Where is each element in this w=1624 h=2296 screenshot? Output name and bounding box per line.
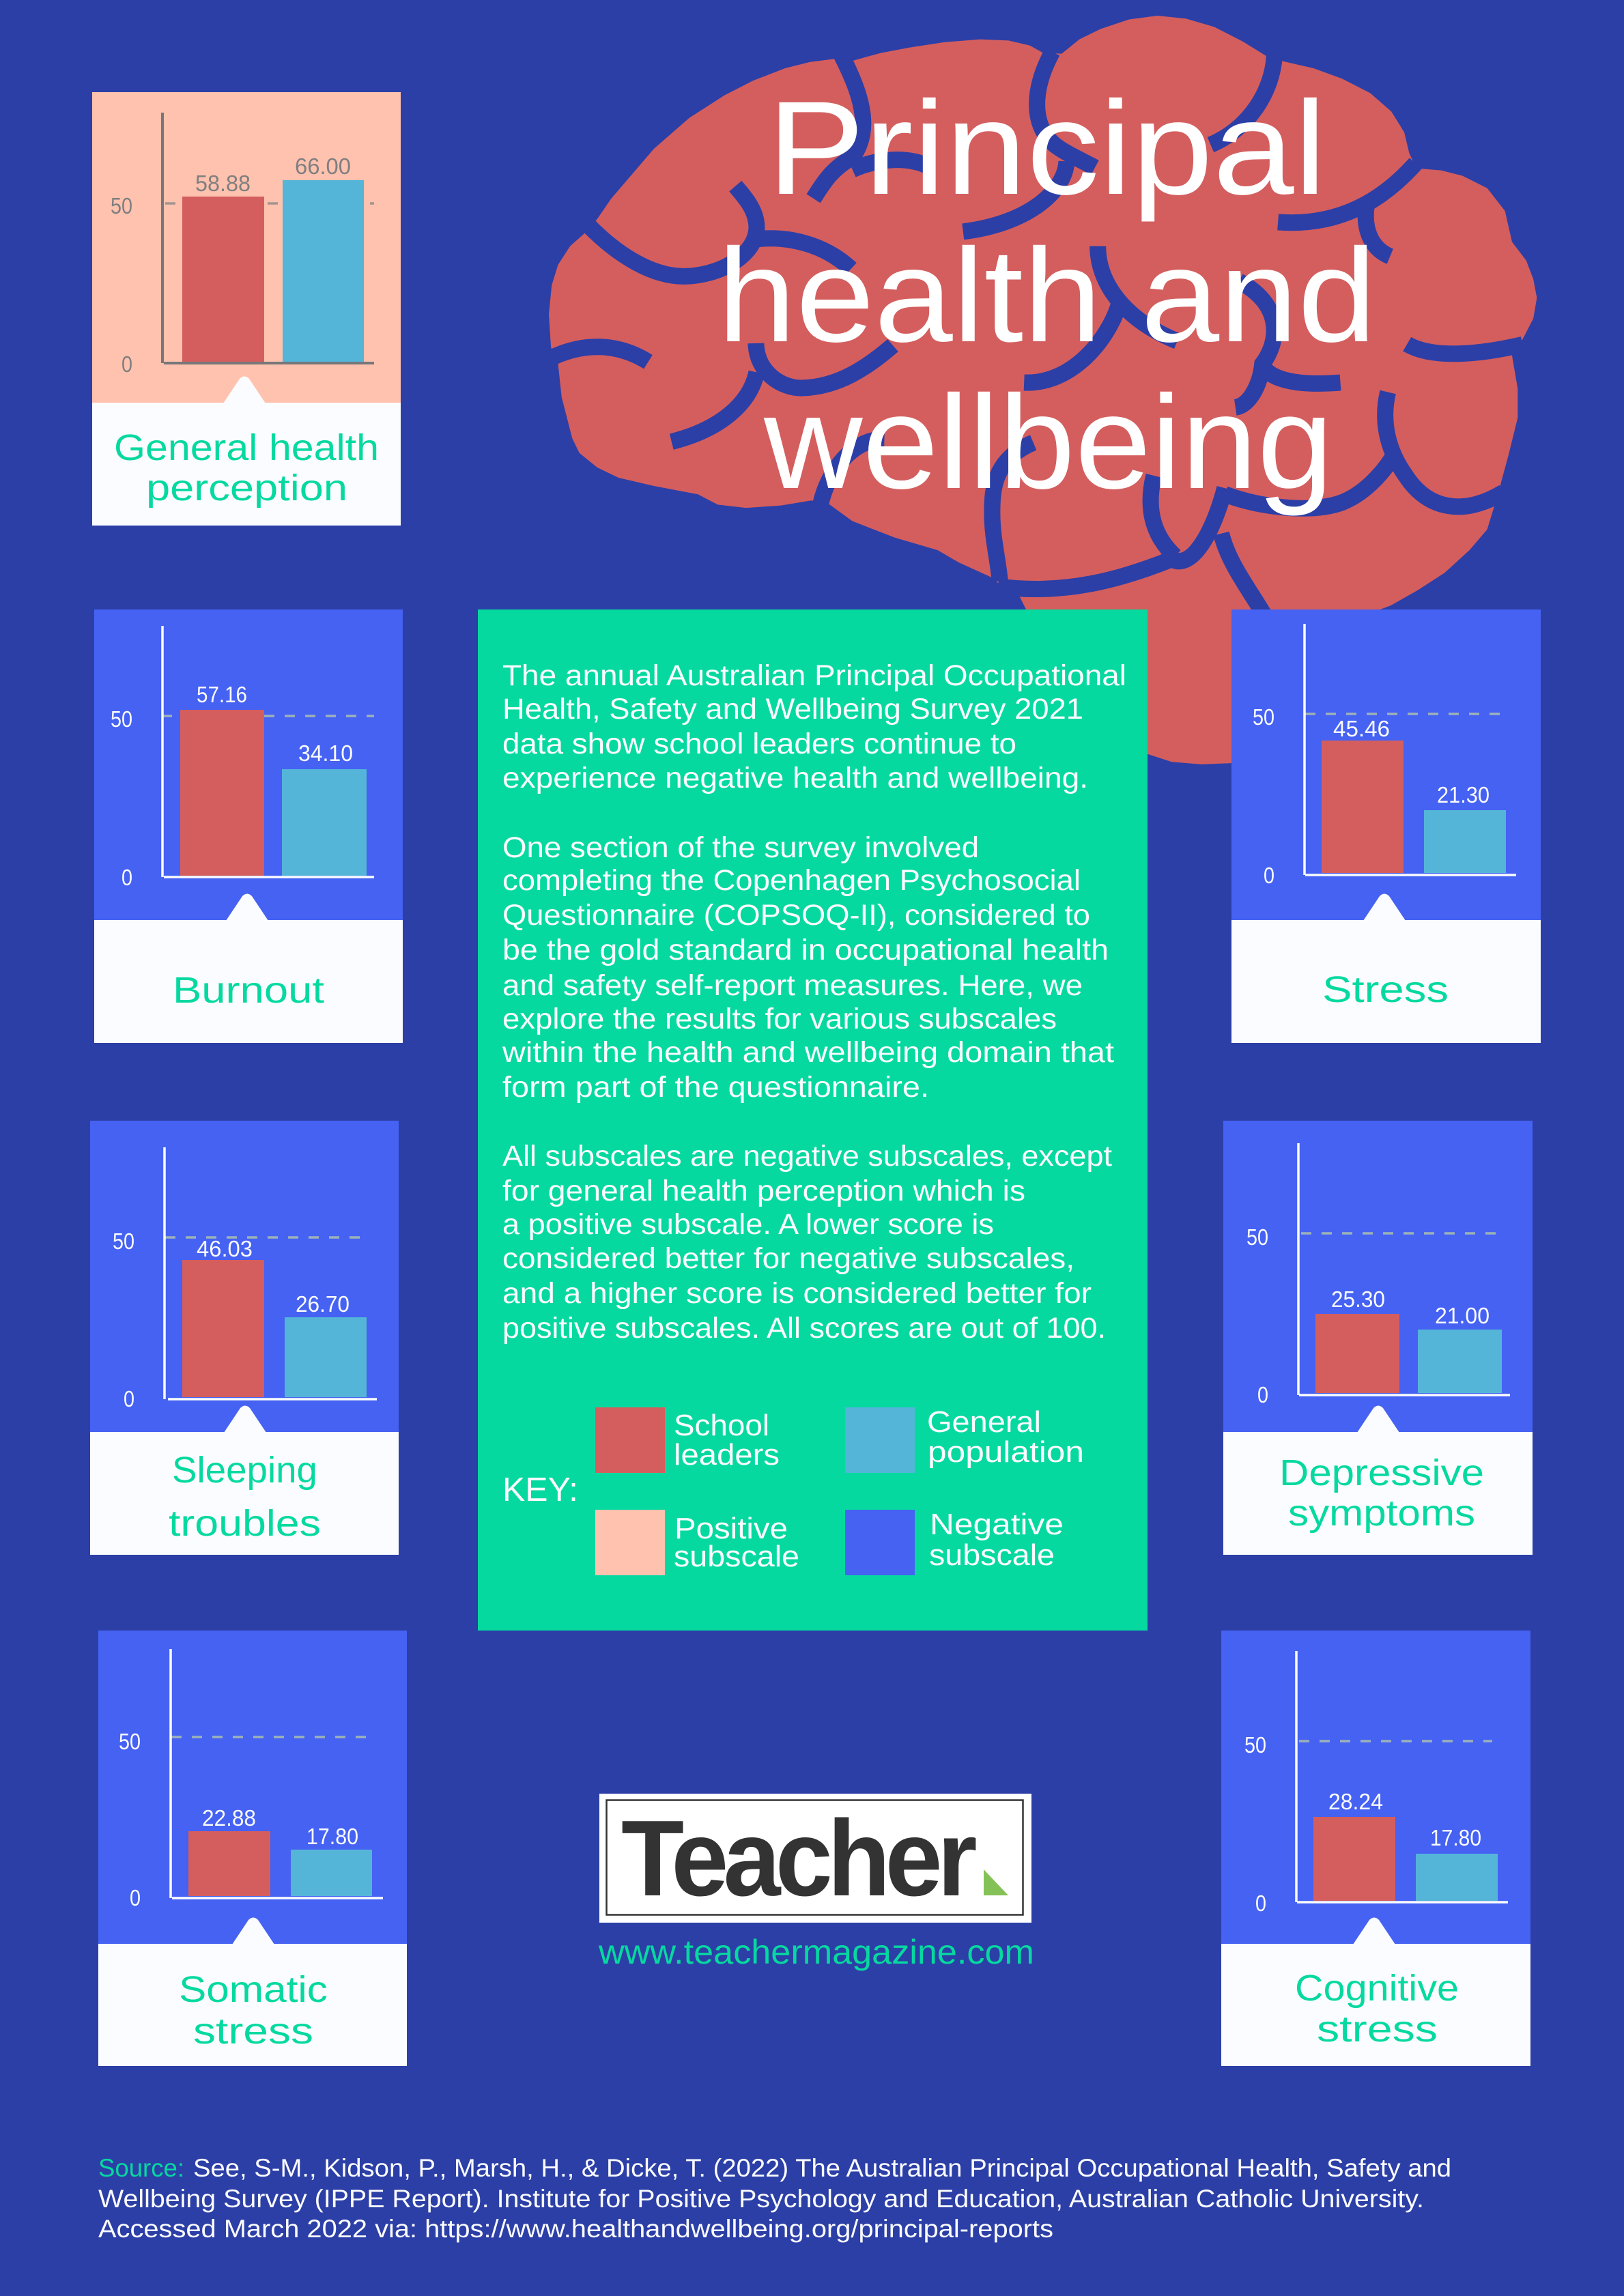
- panel: stress: [1231, 609, 1541, 1043]
- label: sleeping troubles: Sleeping: [172, 1450, 317, 1491]
- source citation: Wellbeing Survey (IPPE Report). Institute for Positive Psychology and Education, Australian Catholic University.: [98, 2185, 1424, 2213]
- text block: questionnaire description: be the gold standard in occupational health: [502, 934, 1109, 966]
- bar chart: somatic stress: 22.88: [202, 1805, 256, 1831]
- bar chart: depressive symptoms: [1247, 1143, 1510, 1407]
- bar chart: stress: 50: [1253, 704, 1274, 730]
- bar chart: sleeping troubles: 46.03: [197, 1236, 253, 1261]
- bar chart: depressive symptoms: 50: [1247, 1224, 1268, 1250]
- bar chart: sleeping troubles: 0: [124, 1386, 134, 1411]
- text block: survey introduction: The annual Australian Principal Occupational: [502, 659, 1126, 692]
- bar chart: stress: 0: [1264, 863, 1274, 888]
- text block: survey introduction: Health, Safety and Wellbeing Survey 2021: [502, 693, 1083, 726]
- legend: key: subscale: [929, 1538, 1055, 1572]
- panel: somatic stress: [98, 1631, 407, 2066]
- bar chart: burnout: [111, 626, 374, 890]
- legend: key: Positive: [674, 1512, 788, 1545]
- bar chart: stress: 45.46: [1333, 716, 1390, 741]
- text block: subscale explanation: and a higher score is considered better for: [502, 1277, 1092, 1310]
- label: cognitive stress: [1295, 1968, 1459, 2050]
- panel: depressive symptoms: [1223, 1121, 1533, 1555]
- bar chart: cognitive stress: 50: [1244, 1732, 1266, 1757]
- bar chart: stress: [1253, 624, 1516, 888]
- panel: cognitive stress: [1221, 1631, 1530, 2066]
- label: somatic stress: [179, 1969, 328, 2052]
- text block: survey introduction: [502, 659, 1126, 794]
- bar chart: somatic stress: [119, 1649, 383, 1910]
- text block: questionnaire description: One section of the survey involved: [502, 831, 979, 864]
- text block: questionnaire description: form part of the questionnaire.: [502, 1071, 929, 1104]
- bar chart: burnout: 57.16: [197, 682, 247, 707]
- legend: key: [502, 1405, 1084, 1575]
- legend: key: School: [674, 1409, 769, 1442]
- bar chart: sleeping troubles: 26.70: [296, 1291, 350, 1317]
- label: general health perception: [114, 427, 379, 508]
- legend: key: KEY:: [502, 1472, 578, 1508]
- source citation: See, S-M., Kidson, P., Marsh, H., & Dicke, T. (2022) The Australian Principal Occupational Health, Safety and: [193, 2154, 1451, 2182]
- bar chart: depressive symptoms: 25.30: [1331, 1287, 1385, 1312]
- title: wellbeing: [763, 368, 1333, 517]
- bar chart: cognitive stress: 17.80: [1430, 1825, 1481, 1850]
- illustration: brain: [547, 16, 1537, 764]
- label: sleeping troubles: troubles: [169, 1503, 321, 1544]
- label: depressive symptoms: [1279, 1452, 1484, 1534]
- panel: introduction and key: [478, 609, 1148, 1631]
- panel: general health perception: [92, 92, 401, 526]
- title: health and: [717, 221, 1376, 370]
- bar chart: cognitive stress: [1244, 1651, 1508, 1916]
- bar chart: general health perception: 0: [122, 351, 132, 377]
- title: Principal: [767, 74, 1326, 223]
- bar chart: sleeping troubles: [113, 1147, 377, 1411]
- bar chart: depressive symptoms: 0: [1257, 1382, 1268, 1407]
- panel: burnout: [94, 609, 403, 1043]
- source citation: Accessed March 2022 via: https://www.healthandwellbeing.org/principal-reports: [98, 2215, 1053, 2243]
- panel: sleeping troubles: [90, 1121, 399, 1555]
- text block: subscale explanation: [502, 1140, 1112, 1345]
- legend: key: population: [928, 1435, 1084, 1469]
- label: general health perception: perception: [146, 468, 347, 508]
- label: depressive symptoms: Depressive: [1279, 1452, 1484, 1493]
- text block: subscale explanation: positive subscales. All scores are out of 100.: [502, 1312, 1106, 1345]
- text block: questionnaire description: and safety self-report measures. Here, we: [502, 969, 1083, 1002]
- website link: www.teachermagazine.com: [598, 1933, 1034, 1971]
- bar chart: general health perception: 50: [111, 193, 132, 218]
- title: [717, 74, 1376, 517]
- legend: key: leaders: [674, 1438, 780, 1472]
- label: depressive symptoms: symptoms: [1288, 1493, 1475, 1534]
- bar chart: sleeping troubles: 50: [113, 1229, 134, 1254]
- bar chart: burnout: 50: [111, 706, 132, 732]
- bar chart: cognitive stress: 0: [1255, 1891, 1266, 1916]
- label: somatic stress: Somatic: [179, 1969, 328, 2010]
- bar chart: depressive symptoms: 21.00: [1435, 1303, 1490, 1328]
- bar chart: burnout: 0: [122, 865, 132, 890]
- text block: questionnaire description: within the health and wellbeing domain that: [502, 1036, 1114, 1069]
- bar chart: stress: 21.30: [1437, 782, 1490, 807]
- text block: questionnaire description: completing the Copenhagen Psychosocial: [502, 864, 1081, 897]
- label: somatic stress: stress: [193, 2011, 313, 2052]
- text block: survey introduction: data show school leaders continue to: [502, 728, 1016, 760]
- text block: questionnaire description: explore the results for various subscales: [502, 1003, 1057, 1035]
- bar chart: somatic stress: 17.80: [307, 1824, 358, 1849]
- label: burnout: Burnout: [173, 970, 324, 1011]
- text block: questionnaire description: Questionnaire (COPSOQ-II), considered to: [502, 899, 1090, 932]
- source citation: Source:: [98, 2154, 184, 2182]
- logo: Teacher: Teacher: [621, 1798, 976, 1919]
- text block: questionnaire description: [502, 831, 1114, 1104]
- text block: survey introduction: experience negative health and wellbeing.: [502, 762, 1088, 794]
- source citation: [98, 2154, 1451, 2243]
- label: cognitive stress: stress: [1317, 2009, 1438, 2050]
- text block: subscale explanation: considered better for negative subscales,: [502, 1242, 1074, 1275]
- label: cognitive stress: Cognitive: [1295, 1968, 1459, 2009]
- bar chart: cognitive stress: 28.24: [1328, 1789, 1383, 1814]
- label: general health perception: General health: [114, 427, 379, 468]
- bar chart: somatic stress: 50: [119, 1729, 141, 1754]
- bar chart: general health perception: [111, 113, 374, 377]
- text block: subscale explanation: a positive subscale. A lower score is: [502, 1208, 994, 1241]
- text block: subscale explanation: All subscales are negative subscales, except: [502, 1140, 1112, 1173]
- bar chart: general health perception: 58.88: [195, 171, 251, 196]
- legend: key: General: [927, 1405, 1041, 1439]
- bar chart: burnout: 34.10: [298, 741, 353, 766]
- bar chart: general health perception: 66.00: [295, 154, 351, 179]
- label: stress: Stress: [1322, 969, 1449, 1010]
- bar chart: somatic stress: 0: [130, 1885, 141, 1910]
- label: sleeping troubles: [169, 1450, 321, 1544]
- legend: key: Negative: [930, 1508, 1064, 1541]
- text block: subscale explanation: for general health perception which is: [502, 1175, 1025, 1207]
- legend: key: subscale: [674, 1540, 799, 1573]
